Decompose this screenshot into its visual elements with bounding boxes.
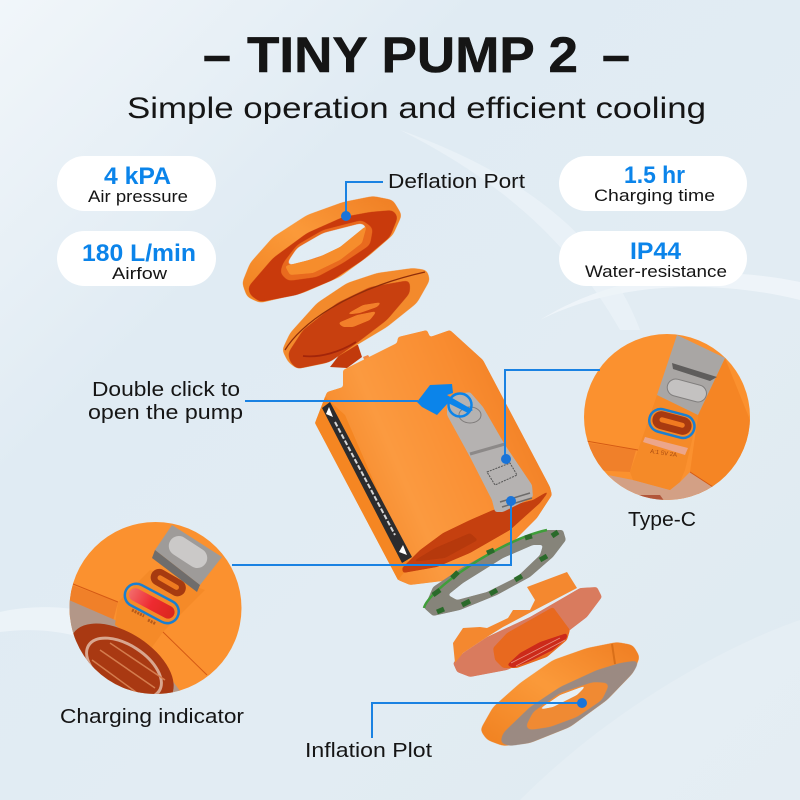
- charging indicator detail circle: [70, 522, 242, 694]
- stat pill: water resistance: IP44: [630, 238, 682, 265]
- stat pill: charging time: Charging time: [594, 186, 715, 205]
- silicone valve disc: [282, 268, 430, 369]
- type-c detail circle: A:1 5V 2A: [650, 449, 677, 459]
- callout: charging indicator: Charging indicator: [60, 706, 244, 728]
- callout: double click: Double click to: [92, 379, 240, 401]
- top deflation ring: [242, 196, 402, 303]
- stat pill: airflow: Airfow: [112, 264, 168, 283]
- title: TINY PUMP 2: [247, 27, 578, 83]
- main cylinder body: [315, 330, 552, 585]
- exploded pump illustration: [242, 196, 640, 746]
- stat pill: airflow: [57, 231, 216, 286]
- title: –: [602, 27, 630, 83]
- bottom inflation ring: [480, 642, 640, 746]
- stat pill: water resistance: [559, 231, 747, 286]
- product label strip: [322, 402, 412, 563]
- blue press icon: [417, 384, 473, 416]
- callout: inflation port: [305, 698, 587, 762]
- callout: charging indicator: [60, 496, 516, 728]
- grey control strap: [447, 392, 533, 512]
- subtitle: Simple operation and efficient cooling: [127, 92, 706, 125]
- callout: type-c: Type-C: [628, 509, 696, 531]
- stat pill: airflow: 180 L/min: [82, 240, 196, 267]
- callout: double click: open the pump: [88, 402, 243, 424]
- stat pill: charging time: 1.5 hr: [624, 162, 685, 189]
- stat pill: air pressure: 4 kPA: [104, 163, 171, 190]
- stat pill: water resistance: Water-resistance: [585, 262, 727, 281]
- callout: deflation port: [341, 171, 526, 221]
- stat pill: air pressure: Air pressure: [88, 187, 188, 206]
- circuit board ring: [424, 530, 566, 616]
- type-c detail circle: [584, 334, 750, 505]
- inflation nozzle base: [453, 572, 602, 677]
- stat pill: charging time: [559, 156, 747, 211]
- title: –: [203, 27, 231, 83]
- callout: type-c: [501, 370, 696, 531]
- stat pill: air pressure: [57, 156, 216, 211]
- callout: deflation port: Deflation Port: [388, 171, 526, 193]
- callout: inflation port: Inflation Plot: [305, 740, 433, 762]
- callout: double click: [88, 379, 418, 424]
